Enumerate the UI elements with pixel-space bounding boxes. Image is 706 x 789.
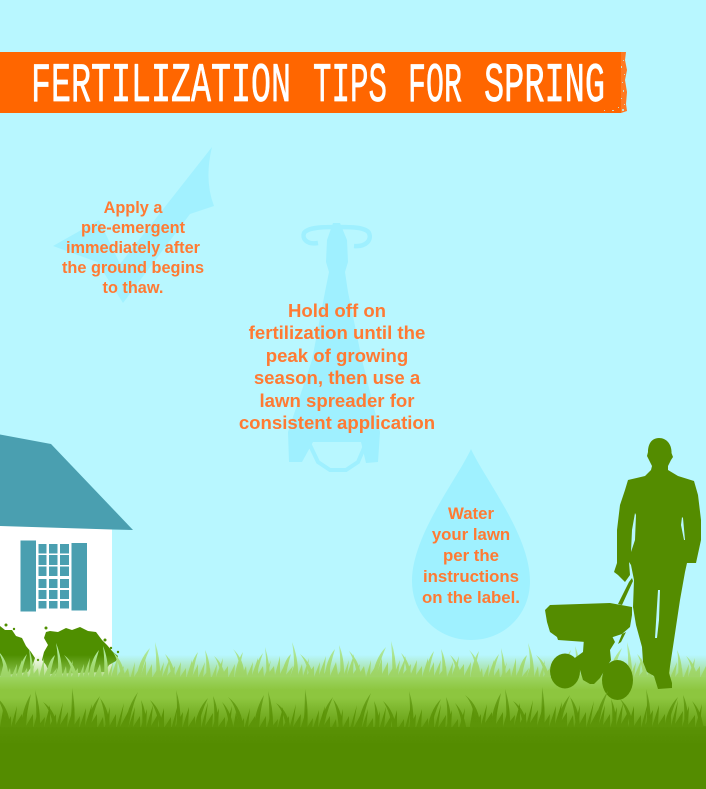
text: lawn spreader tip: consistent application [239,412,435,433]
text: pre-emergent tip: Apply a [104,199,163,217]
text: watering tip: Water [448,504,494,523]
house [0,434,133,676]
tip 2: spreader with text [239,223,435,470]
title text: TIPS [313,54,387,118]
bushes [0,624,119,676]
icon: faint lawn spreader [288,223,380,470]
tip 1: check mark with text [53,147,214,303]
text: pre-emergent tip: immediately after [66,239,201,257]
text: watering tip: on the label. [422,588,520,607]
icon: check mark [53,147,214,303]
text: pre-emergent tip: the ground begins [62,259,204,277]
title banner [0,52,627,118]
text: lawn spreader tip: fertilization until the [249,322,425,343]
text: lawn spreader tip: peak of growing [266,345,408,366]
spreader [545,578,633,700]
text: pre-emergent tip: pre-emergent [81,219,186,237]
text: watering tip: per the [443,546,499,565]
banner: orange strip with rough edge [0,52,627,113]
house roof [0,434,133,530]
house wall [0,526,112,676]
title text: FERTILIZATION [31,54,291,118]
text: watering tip: instructions [423,567,519,586]
window with shutters [20,540,87,612]
man silhouette [614,438,701,689]
grass: dark front layer [0,687,706,789]
man with broadcast spreader [545,438,701,700]
text: lawn spreader tip: lawn spreader for [260,390,414,411]
tip 3: water drop with text [412,449,530,640]
title text: SPRING [484,54,605,118]
text: lawn spreader tip: season, then use a [254,367,421,388]
icon: water drop [412,449,530,640]
text: pre-emergent tip: to thaw. [103,279,163,297]
title text: FOR [408,54,462,118]
text: watering tip: your lawn [432,525,510,544]
grass: light back layer [0,641,706,737]
text: lawn spreader tip: Hold off on [288,300,386,321]
